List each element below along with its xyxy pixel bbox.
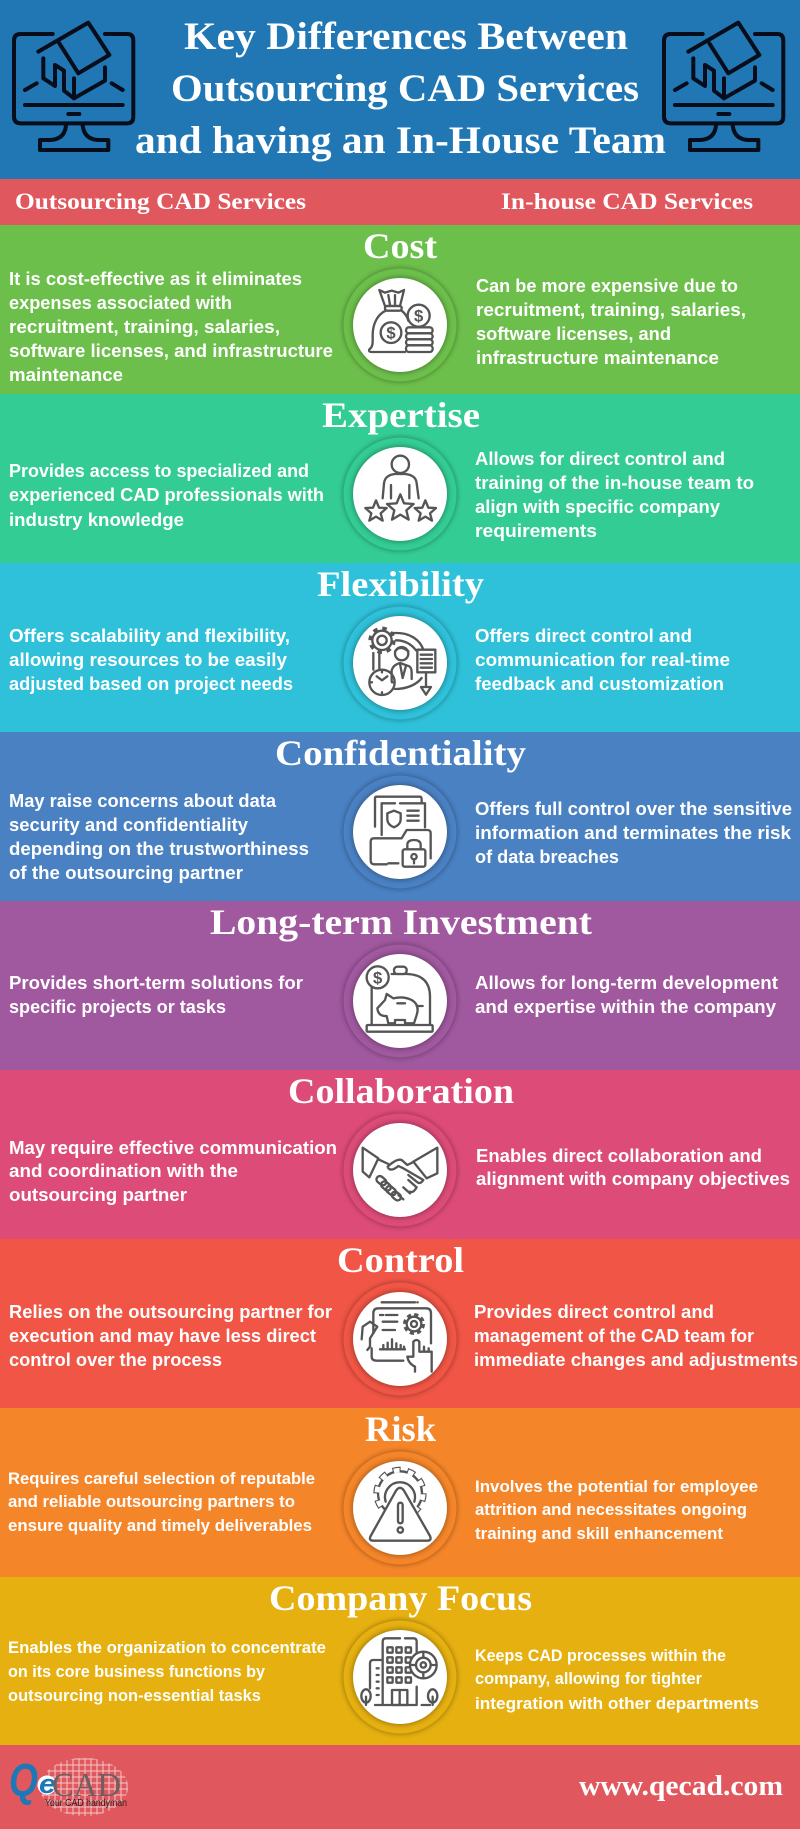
text: in-house cost: software licenses, and: [476, 323, 671, 344]
heading: risk: Risk: [365, 1409, 436, 1449]
text: in-house company focus: company, allowing for tighter: [475, 1669, 702, 1688]
text: in-house control: immediate changes and adjustments: [474, 1349, 798, 1370]
icon: person with three stars: [342, 436, 458, 552]
text: in-house cost: infrastructure maintenance: [476, 347, 719, 368]
text: outsourcing collaboration: May require effective communication: [9, 1137, 337, 1158]
text: in-house expertise: Allows for direct control and: [475, 448, 725, 469]
panel: confidentiality: [0, 732, 800, 901]
text: in-house confidentiality: Offers full control over the sensitive: [475, 798, 792, 819]
logo: QeCAD: Your CAD handyman: [45, 1798, 127, 1809]
text: in-house company focus: integration with other departments: [475, 1694, 759, 1713]
text: in-house long-term: [475, 972, 778, 1017]
icon: piggy bank under dome: [342, 944, 458, 1058]
text: in-house company focus: Keeps CAD processes within the: [475, 1646, 726, 1665]
text: outsourcing company focus: on its core business functions by: [8, 1662, 266, 1681]
text: outsourcing confidentiality: [9, 790, 309, 883]
text: in-house risk: attrition and necessitates ongoing: [475, 1500, 747, 1519]
panel: company focus: [0, 1577, 800, 1745]
column headings band: [0, 179, 800, 225]
panel: risk: [0, 1408, 800, 1577]
text: in-house cost: recruitment, training, salaries,: [476, 299, 746, 320]
title: Outsourcing CAD Services: [171, 67, 639, 110]
heading: expertise: Expertise: [322, 395, 480, 435]
panel: cost: [0, 225, 800, 394]
icon: money bag and coins: [342, 268, 458, 382]
text: in-house collaboration: alignment with company objectives: [476, 1168, 790, 1189]
logo: QeCAD: CAD: [52, 1767, 121, 1804]
text: in-house control: management of the CAD team for: [474, 1325, 754, 1346]
text: in-house control: [474, 1301, 798, 1370]
text: in-house flexibility: Offers direct control and: [475, 625, 692, 646]
column headings band: In-house CAD Services: [501, 189, 753, 215]
text: outsourcing risk: Requires careful selection of reputable: [8, 1469, 315, 1488]
text: outsourcing confidentiality: of the outsourcing partner: [9, 862, 243, 883]
heading: cost: Cost: [363, 226, 437, 266]
column headings band: Outsourcing CAD Services: [15, 189, 306, 215]
text: outsourcing control: execution and may have less direct: [9, 1325, 316, 1346]
footer band: [0, 1745, 800, 1829]
heading: long-term investment: Long-term Investment: [210, 902, 592, 942]
text: outsourcing confidentiality: security and confidentiality: [9, 814, 249, 835]
icon: office building with target: [342, 1620, 458, 1734]
text: outsourcing expertise: industry knowledge: [9, 509, 184, 530]
text: in-house expertise: [475, 448, 754, 541]
heading: company focus: Company Focus: [269, 1578, 532, 1618]
icon: gear clock person and document: [342, 606, 458, 720]
text: outsourcing flexibility: [9, 625, 293, 694]
icon: handshake: [342, 1112, 458, 1228]
text: outsourcing company focus: Enables the organization to concentrate: [8, 1638, 326, 1657]
text: in-house flexibility: communication for real-time: [475, 649, 730, 670]
text: outsourcing cost: expenses associated with: [9, 292, 232, 313]
panel: long-term investment: [0, 901, 800, 1070]
text: in-house control: Provides direct control and: [474, 1301, 714, 1322]
text: outsourcing collaboration: outsourcing partner: [9, 1184, 187, 1205]
icon: secure folder with lock: [342, 774, 458, 890]
text: outsourcing long-term: Provides short-term solutions for: [9, 972, 303, 993]
text: outsourcing company focus: outsourcing non-essential tasks: [8, 1686, 261, 1705]
logo: QeCAD: [9, 1754, 128, 1816]
text: in-house confidentiality: [475, 798, 792, 867]
title: and having an In-House Team: [135, 119, 666, 162]
text: outsourcing collaboration: and coordination with the: [9, 1160, 238, 1181]
text: outsourcing risk: and reliable outsourcing partners to: [8, 1492, 295, 1511]
text: outsourcing expertise: Provides access to specialized and: [9, 460, 309, 481]
text: outsourcing confidentiality: May raise concerns about data: [9, 790, 277, 811]
text: in-house long-term: Allows for long-term development: [475, 972, 778, 993]
website url: www.qecad.com: [579, 1771, 783, 1802]
heading: flexibility: Flexibility: [317, 564, 484, 604]
heading: control: Control: [337, 1240, 464, 1280]
text: outsourcing risk: [8, 1469, 315, 1535]
logo: QeCAD: e: [39, 1769, 56, 1799]
text: outsourcing control: [9, 1301, 332, 1370]
title: Key Differences Between: [184, 15, 628, 58]
text: in-house expertise: requirements: [475, 520, 597, 541]
text: in-house cost: Can be more expensive due to: [476, 275, 738, 296]
icon: computer with house left: [14, 23, 133, 150]
icon: tablet with gear and hands: [342, 1282, 458, 1396]
text: in-house flexibility: [475, 625, 730, 694]
text: outsourcing risk: ensure quality and timely deliverables: [8, 1516, 312, 1535]
icon: piggy bank under dome: $: [373, 968, 383, 987]
text: in-house risk: Involves the potential for employee: [475, 1477, 758, 1496]
text: outsourcing flexibility: Offers scalability and flexibility,: [9, 625, 290, 646]
text: in-house expertise: align with specific company: [475, 496, 721, 517]
text: in-house cost: [476, 275, 746, 368]
text: in-house risk: [475, 1477, 758, 1543]
panel: control: [0, 1239, 800, 1408]
icon: computer with house right: [664, 23, 783, 150]
text: outsourcing flexibility: allowing resources to be easily: [9, 649, 288, 670]
title: [135, 15, 666, 162]
text: outsourcing cost: software licenses, and infrastructure: [9, 340, 333, 361]
text: in-house collaboration: [476, 1145, 790, 1189]
text: outsourcing expertise: [9, 460, 324, 530]
heading: confidentiality: Confidentiality: [275, 733, 526, 773]
icon: money bag and coins: $: [414, 307, 424, 326]
panel: expertise: [0, 394, 800, 563]
text: outsourcing cost: It is cost-effective as it eliminates: [9, 268, 302, 289]
text: in-house confidentiality: of data breaches: [475, 846, 619, 867]
text: in-house expertise: training of the in-house team to: [475, 472, 754, 493]
header panel: [0, 0, 800, 179]
icon: money bag and coins: $: [386, 324, 396, 343]
text: outsourcing flexibility: adjusted based on project needs: [9, 673, 293, 694]
text: outsourcing cost: [9, 268, 333, 385]
text: in-house flexibility: feedback and customization: [475, 673, 724, 694]
logo: QeCAD: Q: [9, 1754, 38, 1806]
text: in-house long-term: and expertise within the company: [475, 996, 777, 1017]
text: in-house company focus: [475, 1646, 759, 1713]
text: outsourcing long-term: [9, 972, 303, 1017]
text: outsourcing collaboration: [9, 1137, 337, 1205]
heading: collaboration: Collaboration: [288, 1071, 514, 1111]
text: outsourcing cost: maintenance: [9, 364, 123, 385]
icon: gear with warning triangle: [342, 1450, 458, 1566]
text: in-house risk: training and skill enhancement: [475, 1524, 723, 1543]
panel: collaboration: [0, 1070, 800, 1239]
text: in-house confidentiality: information and terminates the risk: [475, 822, 792, 843]
text: outsourcing control: Relies on the outsourcing partner for: [9, 1301, 332, 1322]
text: outsourcing long-term: specific projects or tasks: [9, 996, 226, 1017]
text: outsourcing company focus: [8, 1638, 326, 1705]
text: outsourcing cost: recruitment, training, salaries,: [9, 316, 280, 337]
text: outsourcing expertise: experienced CAD professionals with: [9, 484, 324, 505]
text: outsourcing control: control over the process: [9, 1349, 222, 1370]
panel: flexibility: [0, 563, 800, 732]
text: in-house collaboration: Enables direct collaboration and: [476, 1145, 762, 1166]
text: outsourcing confidentiality: depending on the trustworthiness: [9, 838, 309, 859]
